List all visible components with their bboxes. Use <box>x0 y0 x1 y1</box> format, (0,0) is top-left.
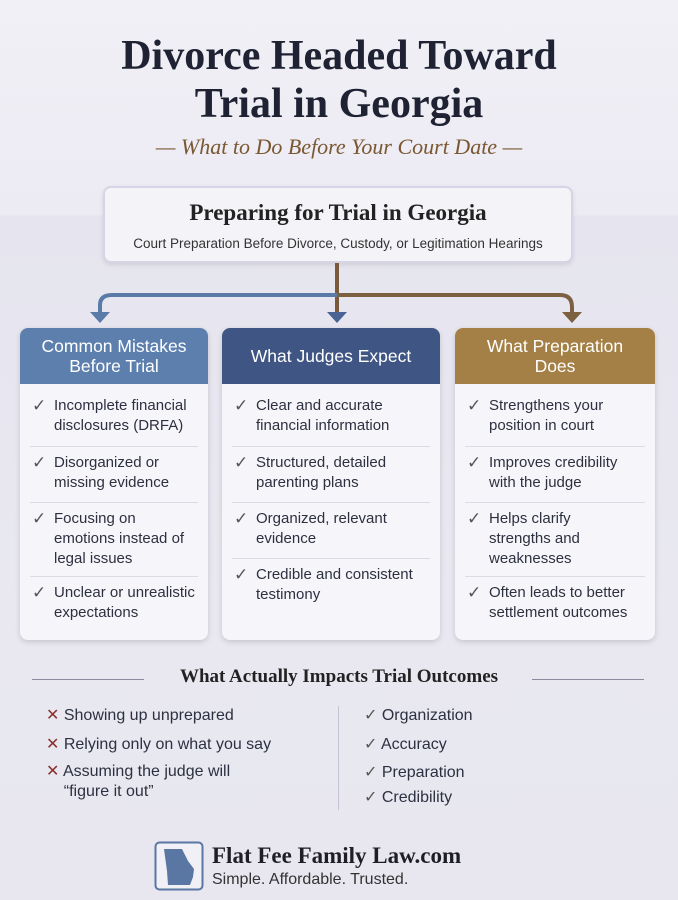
panel: judges expect: Structured, detailed parenting plans <box>256 454 386 491</box>
panel: judges expect <box>222 328 440 640</box>
negative list: ✕ Assuming the judge will <box>46 763 230 780</box>
logo: Flat Fee Family Law.com <box>212 843 461 868</box>
panel: common mistakes: Unclear or unrealistic expectations <box>54 584 195 621</box>
panel: preparation does: Strengthens your position in court <box>489 397 603 434</box>
panel: preparation does <box>455 328 655 640</box>
panel: common mistakes: Disorganized or missing evidence <box>54 454 169 491</box>
negative list <box>46 707 272 800</box>
negative list: ✕ Relying only on what you say <box>46 736 271 753</box>
panel: preparation does: Often leads to better settlement outcomes <box>489 584 627 621</box>
panel: preparation does: Improves credibility with the judge <box>489 454 617 491</box>
top box: Court Preparation Before Divorce, Custody, or Legitimation Hearings <box>133 236 543 251</box>
negative list: “figure it out” <box>64 783 154 800</box>
panel: common mistakes: Incomplete financial disclosures (DRFA) <box>54 397 187 434</box>
positive list <box>364 707 473 806</box>
logo <box>154 842 461 890</box>
title: Divorce Headed Toward <box>121 33 557 79</box>
positive list: ✓ Accuracy <box>364 736 447 753</box>
panel: preparation does: Helps clarify strengths and weaknesses <box>489 510 580 567</box>
panel: common mistakes: Before Trial <box>69 356 159 376</box>
title: Trial in Georgia <box>195 81 483 127</box>
panel: preparation does: What Preparation <box>487 336 623 356</box>
panel: common mistakes <box>20 328 208 640</box>
logo: Simple. Affordable. Trusted. <box>212 871 408 888</box>
top box: Preparing for Trial in Georgia <box>189 200 487 225</box>
bottom heading: What Actually Impacts Trial Outcomes <box>180 666 498 687</box>
top box <box>103 186 573 263</box>
panel: judges expect: What Judges Expect <box>251 346 411 366</box>
subtitle: — What to Do Before Your Court Date — <box>156 134 522 159</box>
positive list: ✓ Credibility <box>364 789 452 806</box>
panel: common mistakes: Common Mistakes <box>42 336 186 356</box>
panel: judges expect: Credible and consistent testimony <box>256 566 413 603</box>
panel: common mistakes: Focusing on emotions instead of legal issues <box>54 510 184 567</box>
positive list: ✓ Organization <box>364 707 473 724</box>
title <box>121 33 557 127</box>
panel: judges expect: Organized, relevant evidence <box>256 510 387 547</box>
arrows <box>90 263 582 323</box>
panel: judges expect: Clear and accurate financial information <box>256 397 389 434</box>
positive list: ✓ Preparation <box>364 764 465 781</box>
negative list: ✕ Showing up unprepared <box>46 707 234 724</box>
panel: preparation does: Does <box>535 356 575 376</box>
